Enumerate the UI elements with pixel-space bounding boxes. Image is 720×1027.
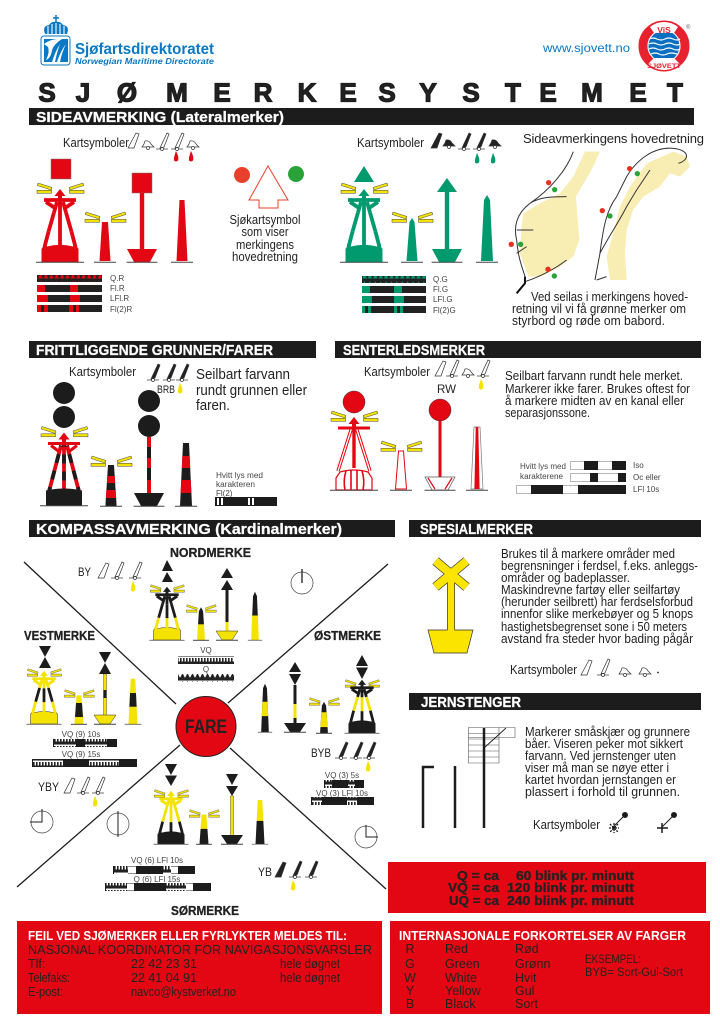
west big buoy	[26, 646, 62, 724]
text: blink rates	[448, 869, 635, 908]
text: ved seilas: styrbord og røde om babord.	[512, 314, 665, 328]
map: southern Norway	[509, 152, 600, 293]
light chart: green: Fl(2)G	[433, 306, 456, 315]
heading: feil ved sjømerker: FEIL VED SJØMERKER ELLER FYRLYKTER MELDES TIL:	[28, 928, 347, 943]
clock: east	[355, 825, 378, 848]
light chart: north	[178, 646, 234, 682]
logo: VIS Sjøvett lifebuoy	[643, 22, 691, 70]
text: colour table: G	[405, 957, 415, 971]
text: blink rates: 240 blink pr. minutt	[507, 894, 635, 908]
heading: østmerke: ØSTMERKE	[314, 629, 381, 643]
text: kartsymboler red: Kartsymboler	[63, 136, 129, 150]
chart arrow with red and green dots	[234, 166, 304, 208]
text: seilbart farvann rundt hele merket: separasjonssone.	[505, 406, 590, 420]
east spar buoy	[284, 662, 306, 732]
green spar buoy	[432, 178, 462, 262]
icon: rod symbol with cross	[657, 812, 676, 833]
text: jernstenger description: viser må man se nøye etter i	[525, 761, 669, 775]
text: jernstenger description: Markerer småskjær og grunnere	[525, 725, 690, 739]
light chart: hvitt lys Fl(2)	[215, 471, 277, 506]
heading: spesialmerker: SPESIALMERKER	[420, 522, 533, 538]
text: colour table: Hvit	[515, 971, 537, 985]
heading: kompassavmerking	[29, 520, 395, 538]
light chart: red: Q.R	[110, 274, 124, 283]
logo: VIS Sjøvett lifebuoy: ViS	[657, 25, 671, 35]
text: blink rates: UQ = ca	[449, 894, 500, 908]
south spar buoy	[221, 774, 243, 844]
text: contact table: Telefaks:	[28, 971, 70, 985]
text: seilbart farvann: Seilbart farvann	[196, 367, 290, 383]
light chart: north: Q	[203, 665, 209, 674]
text: sjøkartsymbol caption: merkingens	[236, 238, 294, 252]
heading: spesialmerker	[409, 520, 701, 538]
heading: internasjonale forkortelser: INTERNASJONALE FORKORTELSER AV FARGER	[399, 928, 687, 943]
red lateral buoy big	[36, 159, 84, 262]
text: eksempel: BYB= Sort-Gul-Sort	[585, 967, 684, 979]
logo: VIS Sjøvett lifebuoy: ®	[686, 24, 691, 31]
red pillar	[171, 200, 193, 262]
icons: special chart symbols	[581, 659, 659, 676]
text: contact table: Tlf:	[28, 957, 45, 971]
east small buoy	[309, 698, 339, 733]
text: jernstenger description: kartet hvordan jernstangen er	[525, 773, 676, 787]
text: ved seilas: Ved seilas i merkingens hoved-	[531, 290, 688, 304]
green lateral buoy big	[340, 166, 388, 262]
icon: rod symbol with star	[609, 812, 628, 833]
text: blink rates: VQ = ca	[448, 881, 500, 895]
text: kartsymboler: Kartsymboler	[533, 818, 600, 832]
icon: crown and shield	[41, 15, 70, 65]
heading: frittliggende: FRITTLIGGENDE GRUNNER/FARER	[36, 343, 274, 359]
RW pillar	[466, 427, 488, 490]
text: eksempel	[585, 954, 684, 979]
light chart: Iso Oc LFl	[516, 461, 661, 494]
text: jernstenger description	[525, 725, 690, 799]
south pillar	[252, 800, 268, 844]
text: kartsymboler: Kartsymboler	[364, 365, 430, 379]
text: sjøkartsymbol caption: hovedretning	[232, 250, 298, 264]
text: seilbart farvann rundt hele merket: Markerer ikke farer. Brukes oftest for	[505, 382, 690, 396]
light chart: hvitt lys Fl(2): Hvitt lys med	[216, 471, 263, 480]
heading: jernstenger: JERNSTENGER	[421, 695, 521, 711]
text: contact table: navco@kystverket.no	[131, 985, 236, 999]
icons: BYB chart symbols	[335, 742, 376, 772]
light chart: green	[362, 275, 456, 315]
west small buoy	[64, 690, 94, 724]
heading: sideavmerking: SIDEAVMERKING (Lateralmerker)	[36, 110, 284, 126]
text: sjøkartsymbol caption	[230, 213, 300, 264]
north pillar	[248, 592, 262, 640]
panel: reporting contact	[17, 921, 382, 1014]
icons: YB chart symbols	[275, 861, 318, 890]
text: colour table: Sort	[515, 997, 538, 1011]
title: SJØMERKESYSTEMET	[38, 78, 683, 108]
text: seilbart farvann rundt hele merket	[505, 369, 690, 420]
text: Sjøfartsdirektoratet: Sjøfartsdirektoratet	[75, 41, 215, 58]
RW spar buoy	[425, 399, 455, 490]
logo: VIS Sjøvett lifebuoy: SJØVETT	[647, 63, 681, 70]
text: ved seilas	[512, 290, 688, 328]
text: BYB: BYB	[311, 748, 331, 760]
light chart: Iso Oc LFl: Hvitt lys med	[520, 462, 566, 471]
text: colour table: Yellow	[445, 984, 482, 998]
text: seilbart farvann rundt hele merket: Seilbart farvann rundt hele merket.	[505, 369, 683, 383]
text: sjøkartsymbol caption: som viser	[242, 225, 288, 239]
text: spesialmerker description	[501, 547, 698, 646]
south small buoy	[189, 810, 219, 844]
BRB pillar	[175, 443, 197, 506]
light chart: red: Fl(2)R	[110, 305, 132, 314]
text: sideavmerkingens hovedretning: Sideavmerkingens hovedretning	[523, 131, 704, 146]
text: spesialmerker description: hastighetsbegrenset sone i 50 meters	[501, 620, 687, 634]
light chart: Iso Oc LFl: Iso	[633, 461, 644, 470]
icons: YBY chart symbols	[64, 777, 105, 806]
north small buoy	[186, 605, 216, 640]
light chart: west: VQ (9) 15s	[62, 750, 100, 759]
text: spesialmerker description: avstand fra steder hvor bading pågår	[501, 632, 693, 646]
text: contact table: E-post:	[28, 985, 63, 999]
panel: colour abbreviations	[390, 921, 710, 1014]
icons: BY chart symbols	[98, 562, 142, 592]
text: colour table: R	[405, 942, 415, 956]
light chart: Iso Oc LFl: karakterene	[520, 472, 564, 481]
light chart: east: VQ (3) 5s	[325, 771, 359, 780]
light chart: Iso Oc LFl: Oc eller	[633, 473, 661, 482]
text: colour table: Grønn	[515, 957, 550, 971]
heading: vestmerke: VESTMERKE	[24, 629, 95, 643]
west spar buoy	[94, 652, 116, 724]
clock: south	[107, 811, 129, 837]
light chart: green: LFl.G	[433, 295, 453, 304]
text: blink rates: 120 blink pr. minutt	[507, 881, 635, 895]
panel: frittliggende grunner	[29, 341, 316, 506]
text: contact table	[28, 957, 340, 999]
text: colour table: Green	[445, 957, 480, 971]
panel: spesialmerker	[409, 520, 701, 677]
panel: blink rates	[388, 862, 706, 913]
heading: sideavmerking	[29, 108, 694, 126]
light chart: red	[37, 274, 132, 314]
text: colour table: Rød	[515, 942, 539, 956]
text: BRB: BRB	[157, 384, 175, 396]
text: contact table: 22 42 23 31	[131, 957, 197, 971]
south big buoy	[153, 764, 189, 844]
panel: sideavmerking	[29, 108, 704, 328]
heading: jernstenger	[409, 693, 701, 711]
text: blink rates: 60 blink pr. minutt	[516, 869, 635, 883]
text: spesialmerker description: områder og badeplasser.	[501, 571, 630, 585]
panel: senterledsmerker	[330, 341, 701, 494]
BRB spar buoy	[134, 390, 164, 506]
text: spesialmerker description: Maskindrevne fartøy eller seilfartøy	[501, 583, 681, 597]
light chart: Iso Oc LFl: LFl 10s	[633, 485, 659, 494]
text: seilbart farvann	[196, 367, 307, 414]
clock: west	[30, 809, 53, 833]
text: YB: YB	[258, 867, 272, 879]
FARE circle: FARE	[185, 717, 227, 738]
heading: senterledsmerker: SENTERLEDSMERKER	[343, 343, 485, 359]
text: seilbart farvann rundt hele merket: å markere midten av en kanal eller	[505, 394, 684, 408]
west pillar	[125, 679, 141, 724]
red spar buoy	[127, 173, 157, 262]
light chart: north: VQ	[200, 646, 212, 655]
text: jernstenger description: farvann. Ved jernstenger uten	[525, 749, 676, 763]
text: colour table: Y	[406, 984, 415, 998]
text: jernstenger description: plassert i forhold til grunnen.	[525, 785, 680, 799]
text: sjøkartsymbol caption: Sjøkartsymbol	[230, 213, 300, 227]
east pillar	[258, 684, 272, 732]
text: Norwegian Maritime Directorate: Norwegian Maritime Directorate	[75, 56, 214, 66]
yellow special mark	[428, 561, 473, 653]
panel: kompassavmerking	[17, 520, 395, 918]
light chart: green: Q.G	[433, 275, 448, 284]
heading: kompassavmerking: KOMPASSAVMERKING (Kardinalmerker)	[36, 522, 342, 538]
text: contact table: 22 41 04 91	[131, 971, 197, 985]
text: koordinator: NASJONAL KOORDINATOR FOR NAVIGASJONSVARSLER	[28, 943, 372, 957]
text: RW: RW	[437, 384, 456, 396]
text: colour table: B	[406, 997, 414, 1011]
light chart: red: Fl.R	[110, 284, 125, 293]
RW small buoy	[381, 441, 422, 490]
text: blink rates: Q = ca	[457, 869, 500, 883]
light chart: south: VQ (6) LFl 10s	[131, 856, 183, 865]
text: ved seilas: retning vil vi få grønne merker om	[512, 302, 686, 316]
light chart: east: VQ (3) LFl 10s	[316, 789, 368, 798]
heading: senterledsmerker	[335, 341, 701, 359]
panel: jernstenger	[409, 693, 701, 833]
text: colour table: W	[404, 971, 416, 985]
text: seilbart farvann: rundt grunnen eller	[196, 383, 307, 399]
icons: red chart symbols	[128, 133, 199, 162]
text: colour table: Black	[445, 997, 476, 1011]
north spar buoy	[216, 568, 238, 640]
iron rods	[423, 728, 515, 828]
text: colour table	[404, 942, 550, 1011]
light chart: west: VQ (9) 10s	[62, 730, 100, 739]
text: kartsymboler: Kartsymboler	[69, 365, 136, 379]
green small buoy	[392, 212, 433, 262]
website link: www.sjovett.no	[542, 43, 630, 55]
text: colour table: Red	[445, 942, 468, 956]
logo: Sjøfartsdirektoratet	[41, 15, 215, 66]
text: spesialmerker description: Brukes til å markere områder med	[501, 547, 675, 561]
icons: BRB chart symbols	[147, 364, 189, 394]
text: YBY: YBY	[38, 782, 59, 794]
east big buoy	[344, 655, 380, 733]
red small buoy	[85, 212, 126, 262]
FARE circle	[176, 696, 236, 756]
light chart: south	[105, 856, 211, 891]
text: BY: BY	[78, 567, 91, 579]
icons: RW chart symbols	[435, 360, 490, 390]
north big buoy	[149, 560, 185, 640]
text: kartsymboler: Kartsymboler	[510, 663, 577, 677]
diagonal dividers	[17, 562, 388, 889]
icons: green chart symbols	[431, 133, 501, 164]
light chart: south: Q (6) LFl 15s	[134, 875, 180, 884]
light chart: red: LFl.R	[110, 294, 129, 303]
text: seilbart farvann: faren.	[196, 398, 230, 414]
text: kartsymboler green: Kartsymboler	[357, 136, 424, 150]
map: northern Norway	[595, 148, 690, 280]
light chart: east	[311, 771, 374, 805]
heading: sørmerke: SØRMERKE	[171, 904, 239, 918]
text: contact table: hele døgnet	[280, 971, 340, 985]
text: eksempel: EKSEMPEL:	[585, 954, 641, 966]
RW big buoy	[330, 391, 378, 490]
BRB small buoy	[91, 456, 132, 506]
text: contact table: hele døgnet	[280, 957, 340, 971]
text: spesialmerker description: begrensninger i ferdsel, f.eks. anleggs-	[501, 559, 698, 573]
light chart: west	[32, 730, 137, 767]
light chart: hvitt lys Fl(2): karakteren	[216, 480, 255, 489]
text: spesialmerker description: (herunder seilbrett) har ferdselsforbud	[501, 595, 693, 609]
light chart: hvitt lys Fl(2): Fl(2)	[216, 489, 233, 498]
green pillar	[476, 195, 498, 262]
text: colour table: White	[445, 971, 477, 985]
text: jernstenger description: båer. Viseren peker mot sikkert	[525, 737, 683, 751]
BRB big buoy	[40, 382, 88, 506]
text: spesialmerker description: innenfor slike merkebøyer og 5 knops	[501, 607, 693, 621]
text: colour table: Gul	[515, 984, 534, 998]
heading: nordmerke: NORDMERKE	[170, 546, 251, 560]
light chart: green: Fl.G	[433, 285, 448, 294]
clock: north	[291, 569, 313, 594]
